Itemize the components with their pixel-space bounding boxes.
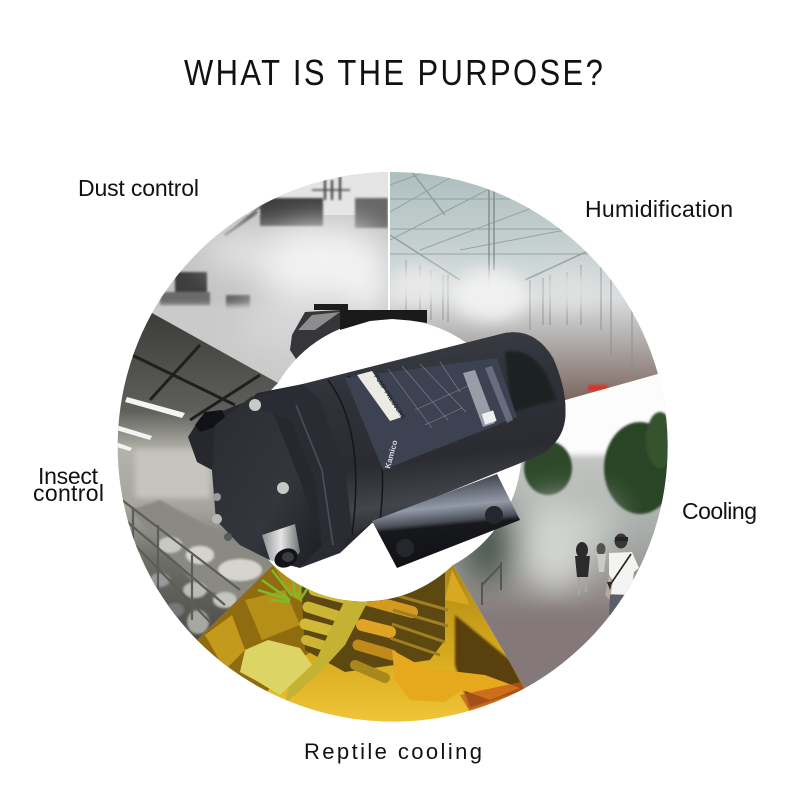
stacked dark logs [390,595,448,655]
bright sky [565,374,666,458]
dark end cap [505,351,556,412]
flange ring [257,384,352,568]
bracket holes [396,506,503,557]
log pile backdrop [300,565,445,672]
label: insect control [33,463,104,506]
pump label text: PUMP PRESSURE [372,374,406,421]
truck in the mist [158,270,252,308]
bearded dragon on logs [286,600,368,700]
ceiling lights [116,397,185,451]
greenhouse posts [406,260,632,370]
panel: reptile cooling photo [197,565,525,722]
infographic canvas [34,60,756,764]
green plant [258,569,308,604]
motor body [303,332,566,540]
panel: insect control photo [118,313,278,640]
body seam [328,376,383,535]
rock and bark on the left [197,565,310,692]
mist cloud [204,224,391,351]
black strip across photos [340,310,427,330]
railing [122,500,240,622]
panel: cooling photo [453,374,668,688]
log pile [305,573,412,678]
fog [460,499,615,591]
pens and sheep [130,500,280,634]
pump silhouette [188,332,566,567]
label: humidification: Humidification [585,196,733,222]
label: reptile cooling: Reptile cooling [304,739,482,764]
label: insect control: Insect [38,463,99,489]
sky [240,170,390,215]
rope posts [482,562,501,605]
mounting bracket [372,474,520,568]
second lizard [392,650,520,702]
ceiling beams [132,345,260,420]
pale skull rock [240,640,312,695]
label: dust control: Dust control [78,175,199,201]
mist glow [390,267,598,321]
panel: humidification photo [390,172,658,400]
white pump label band [357,371,402,421]
label: cooling: Cooling [682,498,757,524]
road [153,301,293,383]
ground [479,608,614,688]
inner bore [282,552,294,562]
pump head cover [212,396,322,568]
red mark on ground [588,385,608,391]
dark right corner [455,615,525,708]
spec grid [388,362,470,428]
label: insect control: control [33,480,104,506]
trees [524,412,676,514]
brass fitting [262,524,300,566]
people in the mist [575,542,606,595]
car [290,304,348,359]
brand mark: Kamico [383,439,399,470]
screws [212,399,289,541]
bright far wall [135,450,210,498]
sky behind bushes [554,400,568,450]
title: WHAT IS THE PURPOSE? [184,54,603,94]
certification block [463,370,495,427]
pump [188,332,566,571]
spec label [345,358,517,470]
fitting outlet [271,545,301,571]
man in white shirt [605,534,639,615]
road sign and buildings [225,176,388,235]
panel: dust control photo [152,172,388,383]
inlet port [195,410,226,432]
greenhouse roof frame [390,172,589,281]
